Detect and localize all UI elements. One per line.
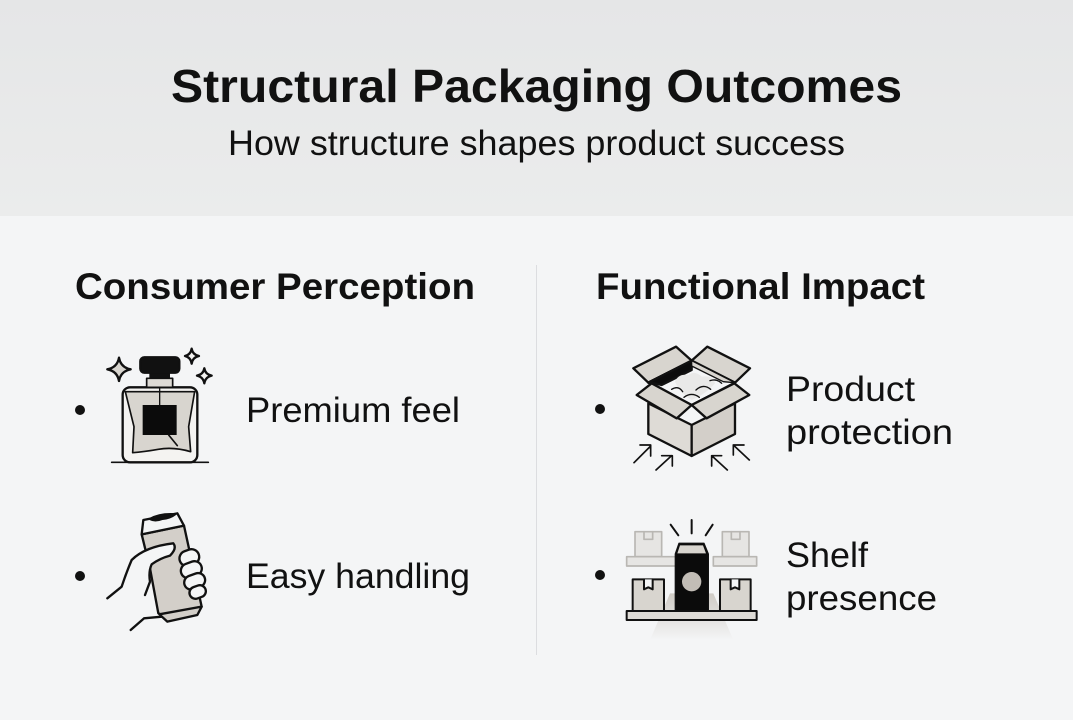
label: shelf presence — [786, 536, 937, 618]
header band — [0, 0, 1073, 216]
heading: functional impact: Functional Impact — [596, 266, 925, 307]
panel: functional impact — [595, 266, 953, 640]
label: product protection: Product — [786, 370, 915, 409]
icon: open box with arrows — [633, 347, 750, 470]
label: shelf presence: presence — [786, 579, 937, 618]
bullet: easy handling — [75, 571, 85, 581]
label: product protection — [786, 370, 953, 452]
icon: hand holding bottle — [107, 513, 208, 630]
label: premium feel: Premium feel — [246, 391, 460, 430]
subtitle: How structure shapes product success — [228, 124, 845, 163]
label: easy handling: Easy handling — [246, 557, 470, 596]
panel: consumer perception — [75, 266, 475, 630]
icon: perfume bottle — [107, 349, 212, 462]
heading: consumer perception: Consumer Perception — [75, 266, 475, 307]
bullet: premium feel — [75, 405, 85, 415]
title: Structural Packaging Outcomes — [171, 60, 902, 112]
label: shelf presence: Shelf — [786, 536, 868, 575]
icon: product on shelf — [627, 520, 757, 640]
bullet: shelf presence — [595, 570, 605, 580]
bullet: product protection — [595, 404, 605, 414]
label: product protection: protection — [786, 413, 953, 452]
